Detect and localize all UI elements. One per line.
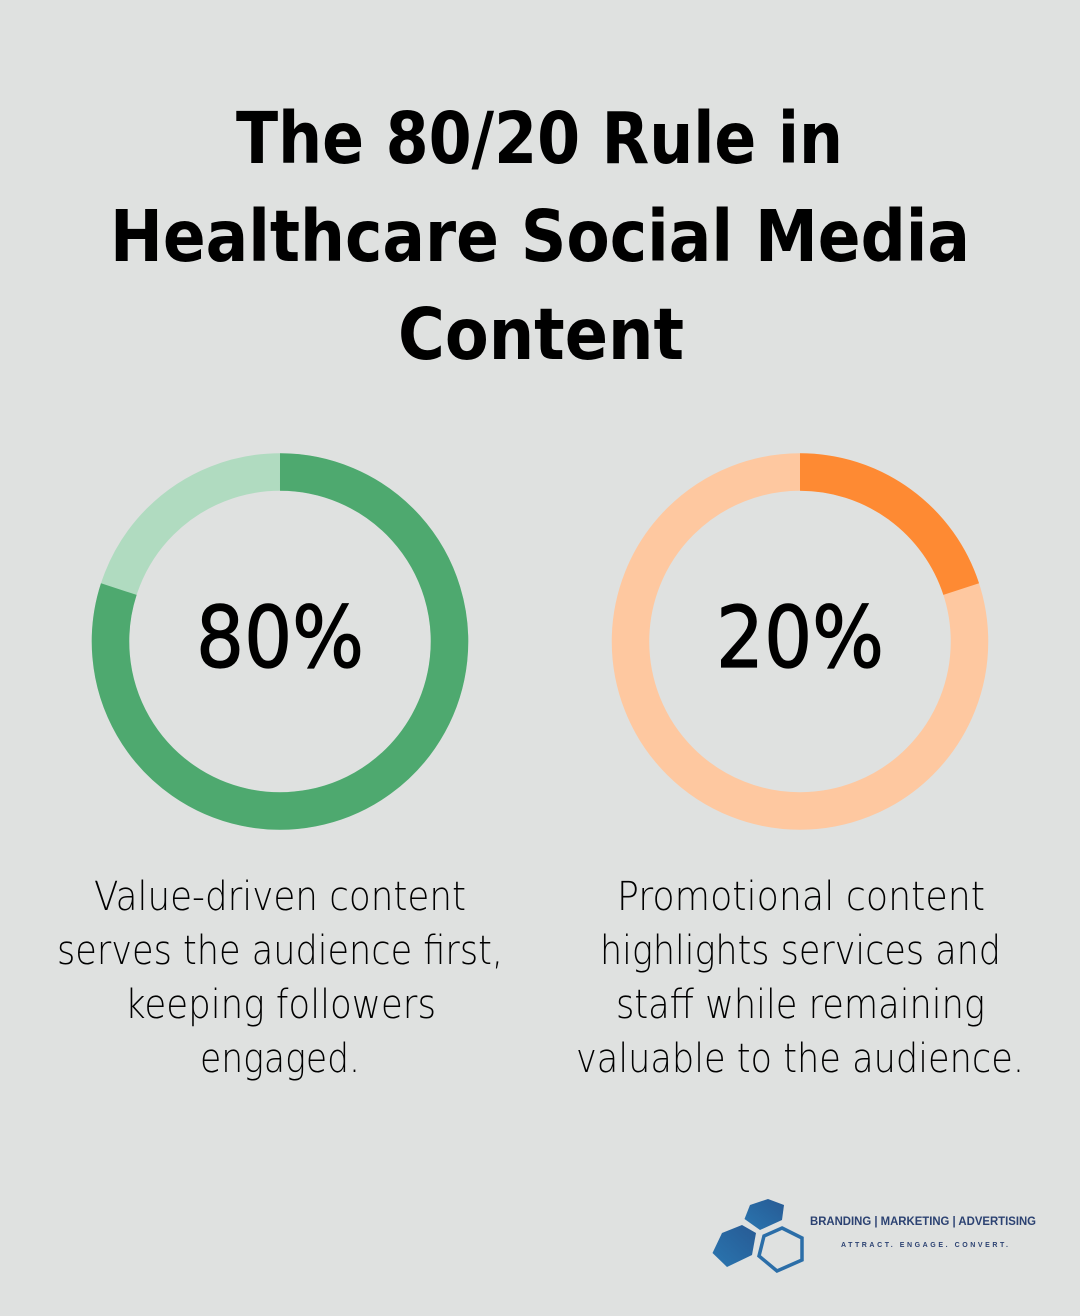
description: value-driven content: keeping followers <box>125 982 436 1028</box>
title: The 80/20 Rule in <box>236 97 843 180</box>
description: promotional content: staff while remaining <box>616 982 985 1028</box>
panel: 20% promotional <box>576 472 1024 1082</box>
title: Healthcare Social Media <box>110 195 970 278</box>
description: promotional content: valuable to the audience. <box>576 1036 1024 1082</box>
description: promotional content: Promotional content <box>617 874 985 920</box>
description: value-driven content: Value-driven content <box>94 874 466 920</box>
donut chart: 80% <box>110 472 449 811</box>
description: promotional content: highlights services and <box>600 928 1001 974</box>
logo <box>712 1199 1036 1271</box>
icon: hexagons <box>712 1199 802 1271</box>
brand text: BRANDING | MARKETING | ADVERTISING <box>810 1216 1036 1228</box>
description: value-driven content: engaged. <box>200 1036 360 1082</box>
title: Content <box>398 293 684 376</box>
figure: 20%: 20% <box>716 589 884 688</box>
donut chart: 20% <box>630 472 970 811</box>
description: promotional content <box>576 874 1024 1082</box>
title <box>110 97 970 376</box>
figure: 80%: 80% <box>196 589 364 688</box>
description: value-driven content: serves the audience first, <box>57 928 503 974</box>
tagline: ATTRACT. ENGAGE. CONVERT. <box>841 1242 1008 1249</box>
panel: 80% value-driven <box>57 472 503 1082</box>
description: value-driven content <box>57 874 503 1082</box>
